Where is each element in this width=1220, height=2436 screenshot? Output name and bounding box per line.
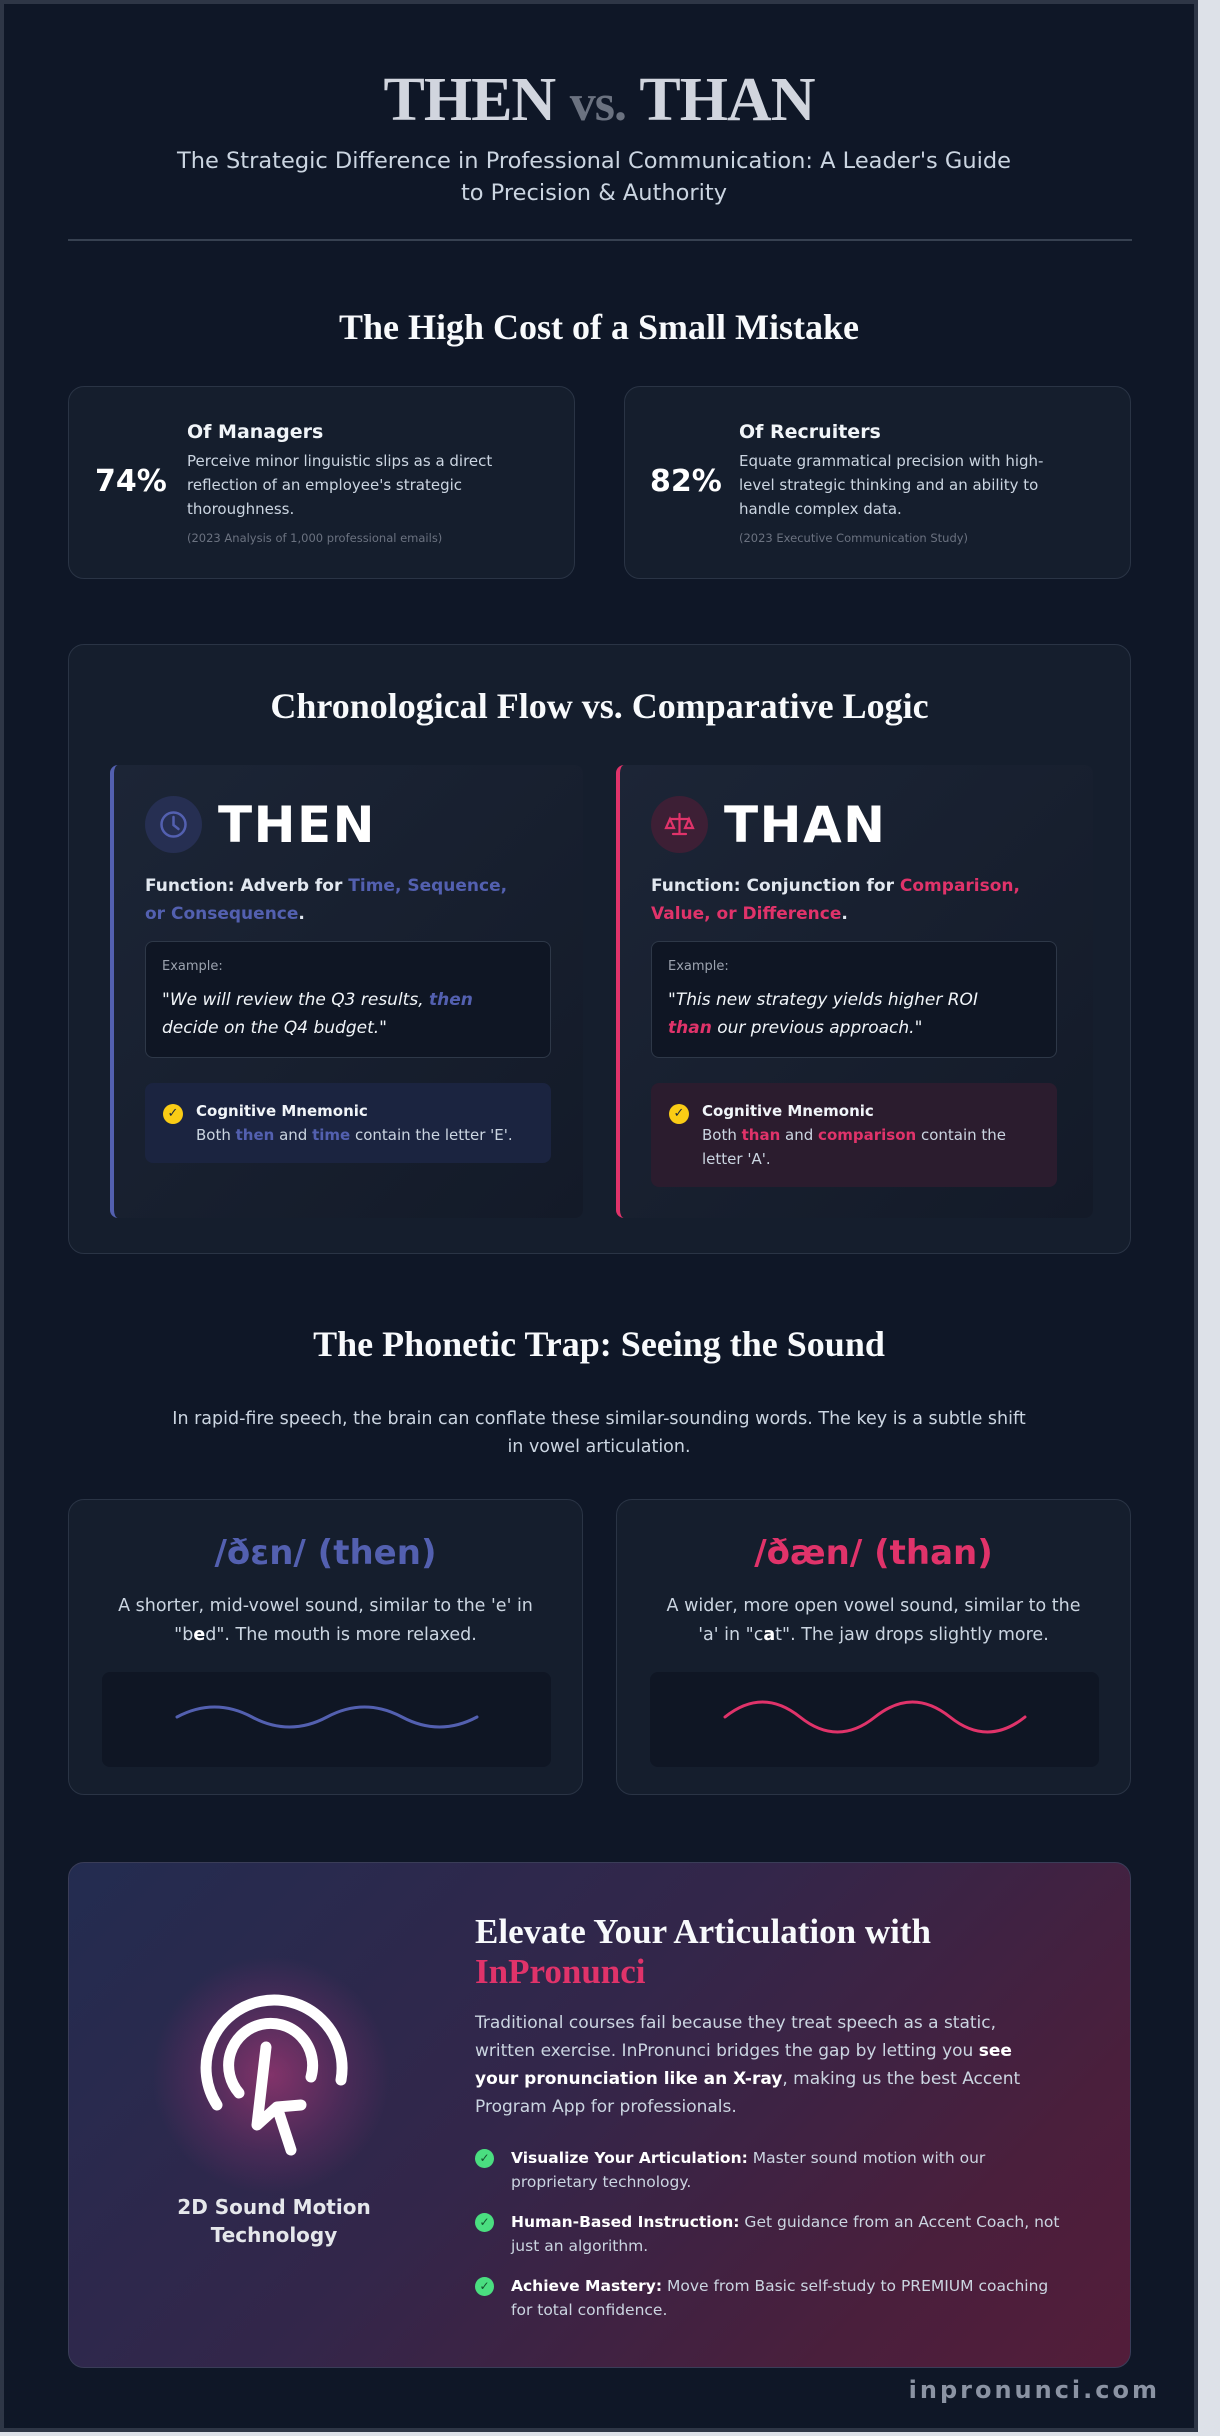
stat 82%: 82%: [650, 464, 722, 499]
example box: [651, 941, 1057, 1058]
title: THEN vs. THAN: [384, 66, 814, 134]
stat text: Equate grammatical precision with high-level strategic thinking and an ability to handle complex data.: [739, 452, 1043, 518]
stat text: [187, 421, 492, 545]
mnemonic box: Cognitive Mnemonic: [702, 1102, 874, 1120]
benefit 2: ✓: [479, 2215, 490, 2229]
wave: than: [650, 1672, 1099, 1767]
example box: [145, 941, 551, 1058]
stat text: (2023 Analysis of 1,000 professional emails): [187, 531, 442, 545]
heading: high cost: The High Cost of a Small Mistake: [339, 307, 859, 347]
description: A wider, more open vowel sound, similar to the 'a' in "cat". The jaw drops slightly more.: [667, 1596, 1080, 1645]
footer url: inpronunci.com: [909, 2376, 1160, 2404]
stat text: Perceive minor linguistic slips as a direct reflection of an employee's strategic thoroughness.: [187, 452, 492, 518]
icon: cursor with sound arcs: [165, 1969, 376, 2180]
stat card: managers: [68, 386, 575, 579]
benefit 3: ✓: [479, 2279, 490, 2293]
example box: Example:: [162, 959, 223, 974]
heading: Chronological Flow vs. Comparative Logic: [270, 686, 929, 726]
panel: CTA: [68, 1862, 1131, 2368]
mnemonic box: [651, 1083, 1057, 1187]
CTA paragraph: Traditional courses fail because they treat speech as a static, written exercise. InPronunci bridges the gap by letting you see your pronunciation like an X-ray, making us the best Accent Program App for professionals.: [475, 2013, 1020, 2117]
icon caption: 2D Sound Motion Technology: [177, 2195, 371, 2247]
mnemonic box: Both than and comparison contain the letter 'A'.: [702, 1126, 1006, 1168]
description: A shorter, mid-vowel sound, similar to the 'e' in "bed". The mouth is more relaxed.: [118, 1596, 533, 1645]
word THEN: THEN: [218, 796, 376, 854]
card: THAN: [616, 765, 1093, 1218]
example box: "We will review the Q3 results, then decide on the Q4 budget.": [162, 990, 473, 1038]
subtitle: The Strategic Difference in Professional Communication: A Leader's Guide to Precision & Authority: [177, 148, 1011, 206]
mnemonic box: Cognitive Mnemonic: [196, 1102, 368, 1120]
stat text: Of Recruiters: [739, 421, 881, 443]
CTA heading: Elevate Your Articulation with InPronunci: [475, 1912, 931, 1991]
heading: phonetic: The Phonetic Trap: Seeing the Sound: [313, 1324, 885, 1364]
benefit 1: Visualize Your Articulation: Master sound motion with our proprietary technology.: [511, 2149, 985, 2191]
example box: "This new strategy yields higher ROI than our previous approach.": [668, 990, 978, 1038]
mnemonic box: Both then and time contain the letter 'E'.: [196, 1126, 513, 1144]
benefit list: [475, 2149, 1060, 2319]
mnemonic box: [145, 1083, 551, 1163]
phonetic heading: /ðɛn/ (then): [215, 1533, 436, 1573]
benefit 1: ✓: [479, 2151, 490, 2165]
intro text: In rapid-fire speech, the brain can conflate these similar-sounding words. The key is a subtle shift in vowel articulation.: [172, 1409, 1026, 1457]
card: than sound: [616, 1499, 1131, 1795]
card: THEN: [110, 765, 583, 1218]
example box: Example:: [668, 959, 729, 974]
function text: Function: Adverb for Time, Sequence, or Consequence.: [145, 876, 507, 924]
panel: comparison: [68, 644, 1131, 1254]
stat text: [739, 421, 1043, 545]
stat card: recruiters: [624, 386, 1131, 579]
stat text: (2023 Executive Communication Study): [739, 531, 968, 545]
icon: check: ✓: [674, 1106, 684, 1121]
icon: check: [669, 1104, 689, 1124]
wave: then: [102, 1672, 551, 1767]
word THAN: THAN: [724, 796, 886, 854]
function text: Function: Conjunction for Comparison, Value, or Difference.: [651, 876, 1020, 924]
stat 74%: 74%: [95, 464, 167, 499]
stat text: Of Managers: [187, 421, 323, 443]
benefit 3: Achieve Mastery: Move from Basic self-study to PREMIUM coaching for total confidence.: [511, 2277, 1048, 2319]
icon: clock: [145, 796, 202, 853]
phonetic heading: /ðæn/ (than): [754, 1533, 993, 1573]
benefit 2: Human-Based Instruction: Get guidance from an Accent Coach, not just an algorithm.: [511, 2213, 1059, 2255]
icon: scales: [651, 796, 708, 853]
card: then sound: [68, 1499, 583, 1795]
icon: check: ✓: [168, 1106, 178, 1121]
icon: check: [163, 1104, 183, 1124]
